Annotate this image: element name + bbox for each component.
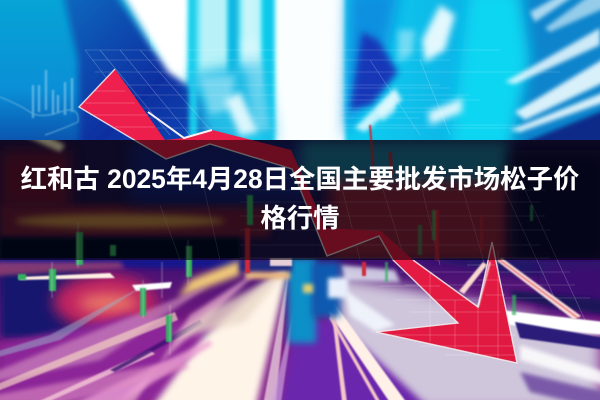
faint candlesticks and wave at upper left xyxy=(0,70,78,135)
lower road: purple motion blur base xyxy=(0,255,600,400)
title: 红和古 2025年4月28日全国主要批发市场松子价 xyxy=(21,164,579,194)
candlesticks: green and red xyxy=(18,195,533,355)
title: 格行情 xyxy=(260,203,340,233)
chart arrow: red zigzag trend descending to large arrowhead xyxy=(79,69,517,363)
dark title band xyxy=(0,140,600,260)
light streaks at upper right xyxy=(200,0,600,136)
stock chart grid xyxy=(85,50,590,320)
upper city: blue and cyan light xyxy=(0,0,600,140)
mid zone behind dark title band xyxy=(0,140,600,258)
city lights near vanishing point xyxy=(240,258,600,343)
grid lines across arrow xyxy=(85,91,517,360)
title xyxy=(21,164,579,233)
traffic light streaks xyxy=(0,260,600,400)
side trend lines near arrow tip xyxy=(370,125,581,320)
